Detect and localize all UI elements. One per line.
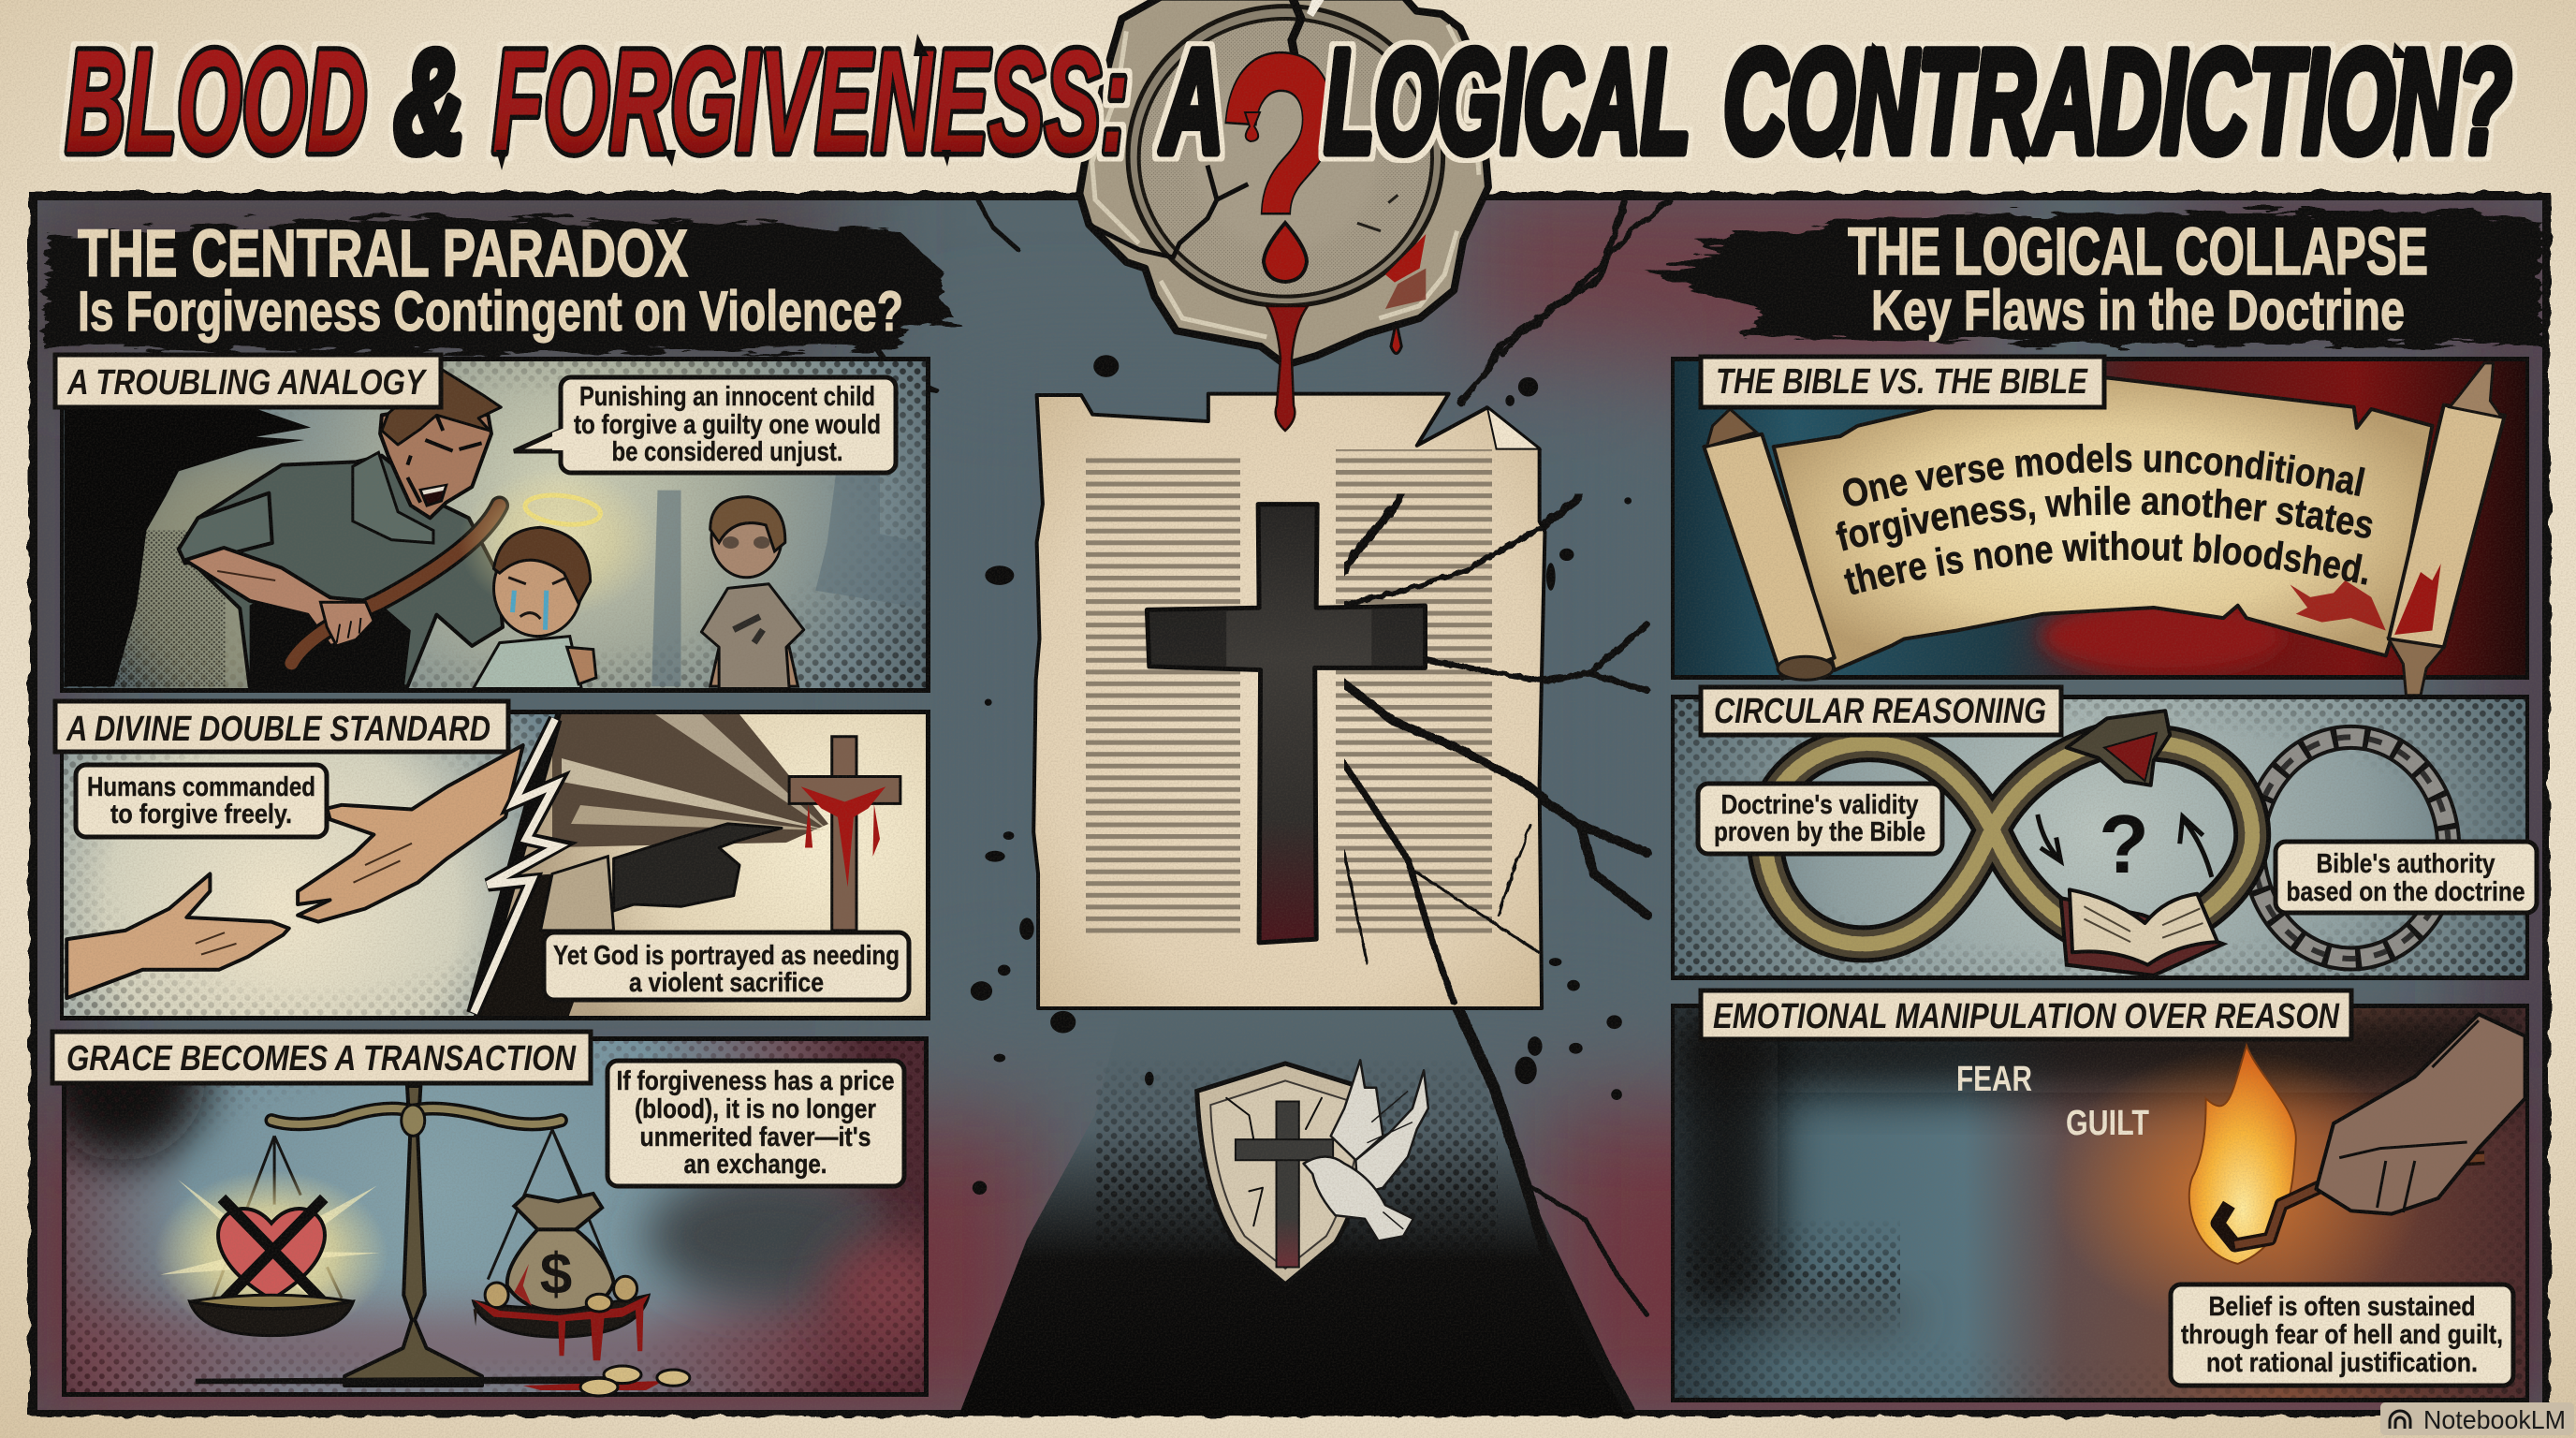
panel: grace becomes a transaction	[37, 992, 955, 1397]
thought cloud	[1668, 1041, 1954, 1240]
callout: doctrine validity: Doctrine's validity	[1720, 790, 1919, 820]
wax seal	[1079, 0, 1488, 431]
title: &	[394, 21, 465, 183]
dollar sign: $	[540, 1242, 572, 1307]
guilty child	[701, 497, 804, 688]
chain ring	[2253, 737, 2449, 959]
shattered page and cross	[1038, 397, 1544, 1284]
callout: belief sustained	[2171, 1284, 2513, 1386]
heading: the logical collapse	[1848, 215, 2428, 342]
notebooklm badge: NotebookLM	[2423, 1405, 2566, 1434]
title: FORGIVENESS:	[492, 21, 1129, 183]
heading: the logical collapse: Key Flaws in the Doctrine	[1871, 279, 2405, 342]
callout: doctrine validity: proven by the Bible	[1714, 817, 1925, 847]
callout: belief sustained: Belief is often sustained	[2209, 1292, 2475, 1322]
speech bubble: Punishing an innocent child	[579, 382, 875, 412]
callout: humans commanded	[76, 765, 327, 837]
label: circular reasoning: CIRCULAR REASONING	[1714, 692, 2046, 731]
label: a divine double standard	[55, 701, 508, 752]
drip under hook	[1245, 112, 1260, 141]
panel: a divine double standard	[55, 701, 930, 1020]
cross	[1147, 505, 1426, 943]
money bag	[474, 1194, 649, 1360]
title: A	[1160, 21, 1223, 183]
label: the bible vs. the bible: THE BIBLE VS. THE BIBLE	[1716, 362, 2088, 402]
heading brush stroke right	[1647, 212, 2542, 345]
callout: bible authority	[2276, 842, 2537, 913]
page cracks	[1038, 397, 1544, 1008]
callout: violent sacrifice: a violent sacrifice	[629, 968, 824, 998]
upper wall cracks	[871, 199, 1670, 403]
heading: the central paradox: THE CENTRAL PARADOX	[78, 217, 688, 291]
callout: bible authority: based on the doctrine	[2286, 877, 2525, 907]
word: fear: FEAR	[1956, 1060, 2032, 1099]
label: a divine double standard: A DIVINE DOUBLE STANDARD	[66, 710, 490, 749]
label: grace becomes a transaction	[52, 1032, 591, 1083]
word: guilt: GUILT	[2066, 1104, 2149, 1143]
callout: grace price: (blood), it is no longer	[635, 1094, 876, 1124]
upper open hand	[298, 745, 523, 922]
heading brush stroke left	[43, 217, 957, 354]
huddled person	[1907, 1123, 2151, 1392]
pointing dark hand	[541, 824, 782, 931]
callout: humans commanded: to forgive freely.	[110, 800, 292, 829]
title: LOGICAL	[1325, 21, 1690, 183]
snake head	[2067, 711, 2170, 785]
scroll text: there is none without bloodshed.	[1844, 531, 2367, 594]
blood drip running to page	[1266, 306, 1308, 431]
blood drop	[1264, 223, 1307, 282]
shadow figure behind man	[65, 409, 311, 686]
callout: belief sustained: not rational justification.	[2206, 1348, 2478, 1378]
label: a troubling analogy: A TROUBLING ANALOGY	[66, 363, 428, 403]
angry man	[179, 368, 503, 686]
flame	[2189, 1046, 2296, 1264]
label: emotional manipulation	[1701, 990, 2351, 1039]
outer wall cracks	[927, 370, 1647, 1412]
scroll text	[1832, 435, 2378, 604]
lightning divider	[474, 719, 558, 1013]
title	[66, 21, 2511, 183]
dark pedestal	[959, 1008, 1634, 1416]
scale stand	[213, 1086, 614, 1386]
panel: a troubling analogy	[55, 355, 930, 712]
callout: grace price: unmerited faver—it's	[640, 1123, 871, 1152]
callout: violent sacrifice: Yet God is portrayed as needing	[553, 941, 900, 971]
bloody cross	[789, 737, 900, 931]
floor and coins	[196, 1366, 690, 1396]
speech bubble	[514, 377, 896, 473]
heading: the central paradox	[78, 217, 903, 343]
question mark: ?	[2099, 798, 2149, 890]
callout: doctrine validity	[1698, 784, 1942, 854]
ground shadow	[1734, 1355, 2178, 1395]
glow and heart with X	[154, 1170, 388, 1339]
dove	[1304, 1060, 1428, 1240]
notebooklm badge	[2380, 1402, 2574, 1435]
scroll text: forgiveness, while another states	[1835, 485, 2372, 550]
shield with cross	[1197, 1064, 1374, 1284]
lower open hand	[66, 873, 289, 998]
halo	[459, 468, 657, 617]
left pan	[189, 1301, 354, 1336]
callout: grace price	[607, 1061, 904, 1186]
scroll text: One verse models unconditional	[1842, 442, 2365, 506]
open bible	[2061, 889, 2223, 976]
callout: humans commanded: Humans commanded	[87, 772, 315, 802]
label: grace becomes a transaction: GRACE BECOMES A TRANSACTION	[66, 1039, 577, 1078]
ink splatter	[971, 355, 1632, 1195]
page text lines	[1086, 449, 1492, 937]
label: circular reasoning	[1701, 687, 2061, 735]
label: emotional manipulation: EMOTIONAL MANIPULATION OVER REASON	[1713, 997, 2340, 1036]
panel: circular reasoning	[1671, 687, 2537, 980]
heading: the central paradox: Is Forgiveness Contingent on Violence?	[78, 280, 903, 343]
title: BLOOD	[66, 21, 367, 183]
callout: bible authority: Bible's authority	[2316, 849, 2496, 879]
label: the bible vs. the bible	[1701, 357, 2104, 407]
torn manuscript page	[1033, 394, 1544, 1008]
crying child	[474, 527, 596, 688]
scroll	[1704, 363, 2505, 696]
callout: belief sustained: through fear of hell and guilt,	[2181, 1320, 2503, 1350]
callout: violent sacrifice	[544, 932, 909, 1000]
snake figure eight	[1764, 735, 2252, 944]
circular arrows	[2038, 814, 2212, 877]
speech bubble: to forgive a guilty one would	[574, 410, 881, 440]
hand with stick	[2217, 1014, 2525, 1245]
center background: pedestal, cracks and manuscript	[927, 355, 1647, 1416]
wall pillar	[651, 473, 921, 686]
speech bubble: be considered unjust.	[612, 437, 842, 467]
callout: grace price: If forgiveness has a price	[616, 1066, 895, 1096]
pedestal halftone	[1095, 1073, 1498, 1237]
panel: the bible vs. the bible	[1671, 354, 2529, 695]
label: a troubling analogy	[55, 355, 441, 407]
callout: grace price: an exchange.	[683, 1150, 827, 1180]
panel: emotional manipulation over reason	[1668, 990, 2529, 1402]
dark wedges and rays	[449, 714, 828, 1020]
